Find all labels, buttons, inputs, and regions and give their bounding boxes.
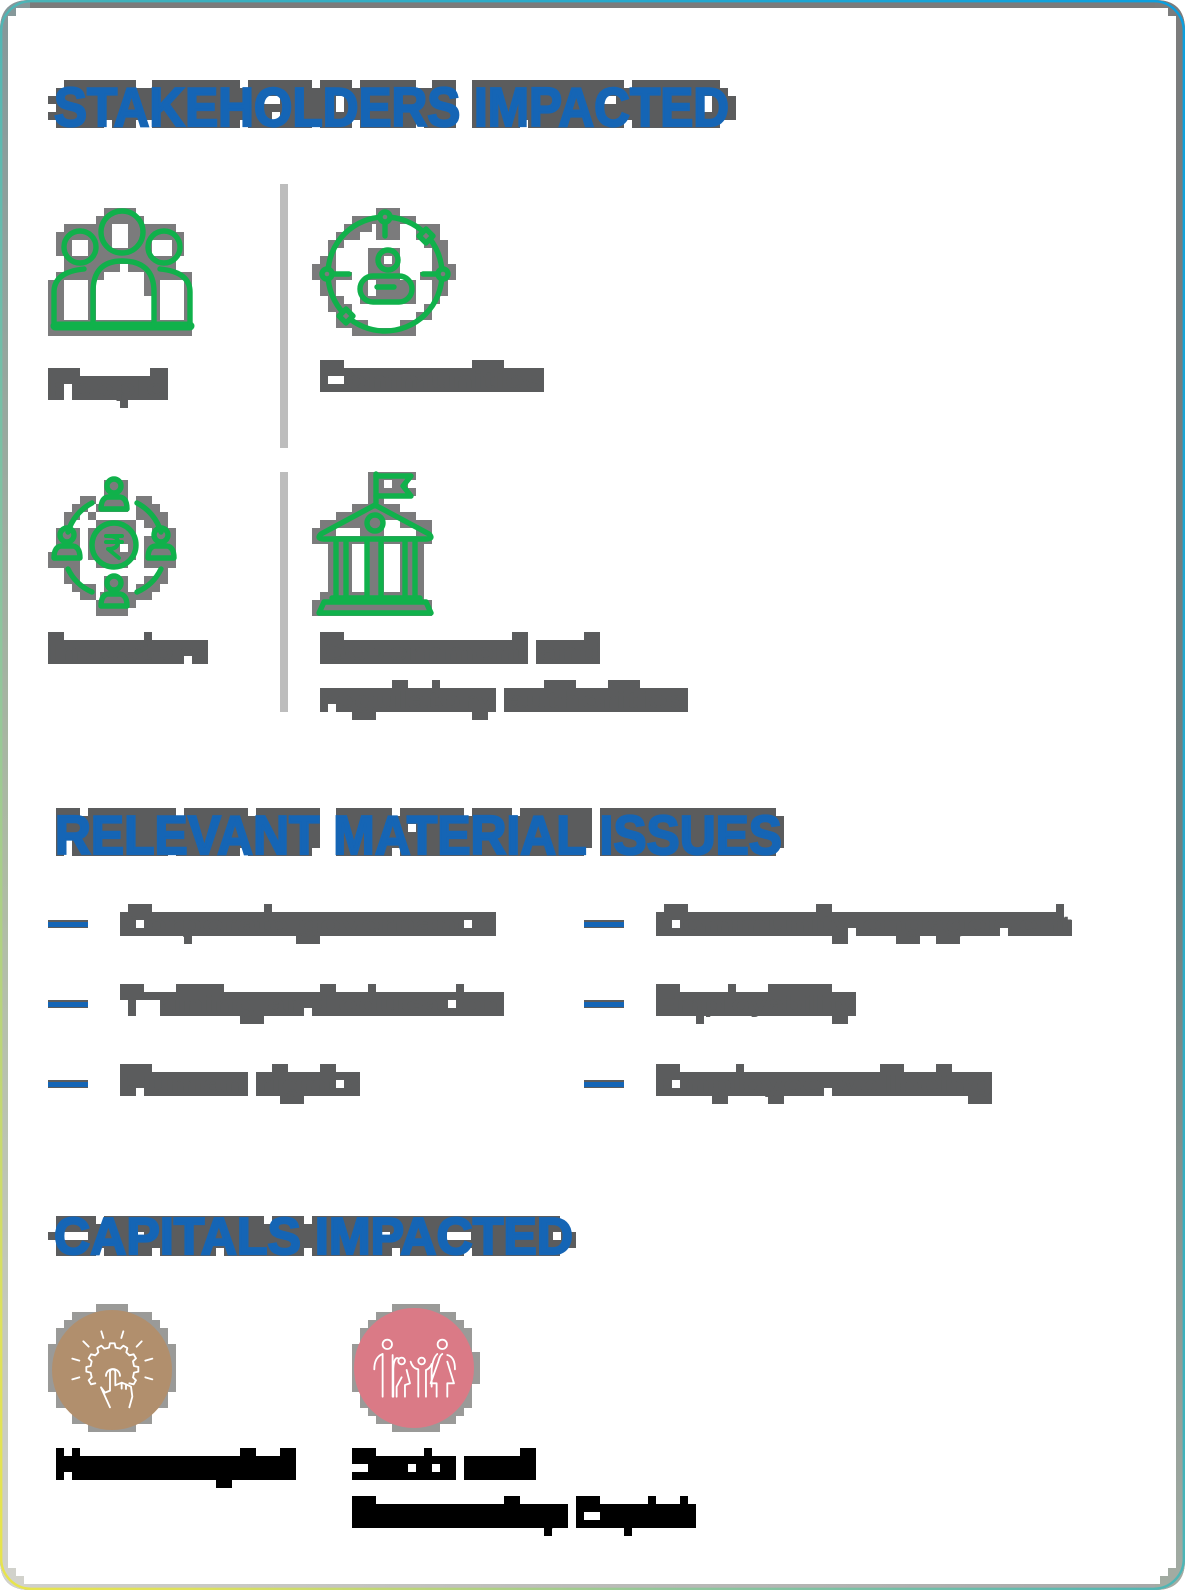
label: people: People <box>48 375 166 401</box>
divider: lower <box>280 472 288 712</box>
bullet: training and education: Training and education <box>120 991 504 1017</box>
label: investors <box>48 636 208 665</box>
label: communities <box>320 364 544 393</box>
bullet: community engagement: Community engagement <box>656 911 1073 937</box>
heading: capitals impacted: CAPITALS IMPACTED <box>54 1208 573 1266</box>
bullet: community engagement <box>584 908 1073 940</box>
label: investors: Investors <box>48 639 208 665</box>
label: human capital: Human capital <box>56 1455 296 1481</box>
icon: communities <box>312 212 456 332</box>
list: material issues <box>48 908 1073 1100</box>
icon: investors <box>48 479 176 612</box>
label: social and relationship capital: Relationship Capital <box>352 1503 696 1529</box>
divider: upper <box>280 184 288 448</box>
label: social and relationship capital: Social and <box>352 1455 536 1481</box>
label: human capital <box>56 1452 296 1484</box>
bullet: corporate governance: Corporate governance <box>120 911 496 937</box>
label: communities: Communities <box>320 367 544 393</box>
label: people <box>48 372 168 404</box>
heading: stakeholders impacted: STAKEHOLDERS IMPACTED <box>54 76 729 138</box>
label: social and relationship capital <box>352 1452 696 1532</box>
bullet: human rights: Human rights <box>120 1071 360 1097</box>
label: government and regulatory authorities: Government and <box>320 639 600 665</box>
bullet: employability: Employability <box>656 991 856 1017</box>
icon: social and relationship capital <box>352 1308 480 1428</box>
heading: relevant material issues: RELEVANT MATERIAL ISSUES <box>55 804 782 866</box>
bullet: employee wellbeing: Employee wellbeing <box>656 1071 992 1097</box>
bullet: employability <box>584 988 856 1020</box>
icon: human capital <box>48 1308 176 1430</box>
bullet: training and education <box>48 988 504 1020</box>
bullet: corporate governance <box>48 908 496 940</box>
label: government and regulatory authorities: regulatory authorities <box>320 687 688 713</box>
icon: government building <box>312 474 432 613</box>
label: government and regulatory authorities <box>320 636 688 716</box>
icon: people <box>48 211 192 332</box>
bullet: human rights <box>48 1068 360 1100</box>
bullet: employee wellbeing <box>584 1068 992 1100</box>
